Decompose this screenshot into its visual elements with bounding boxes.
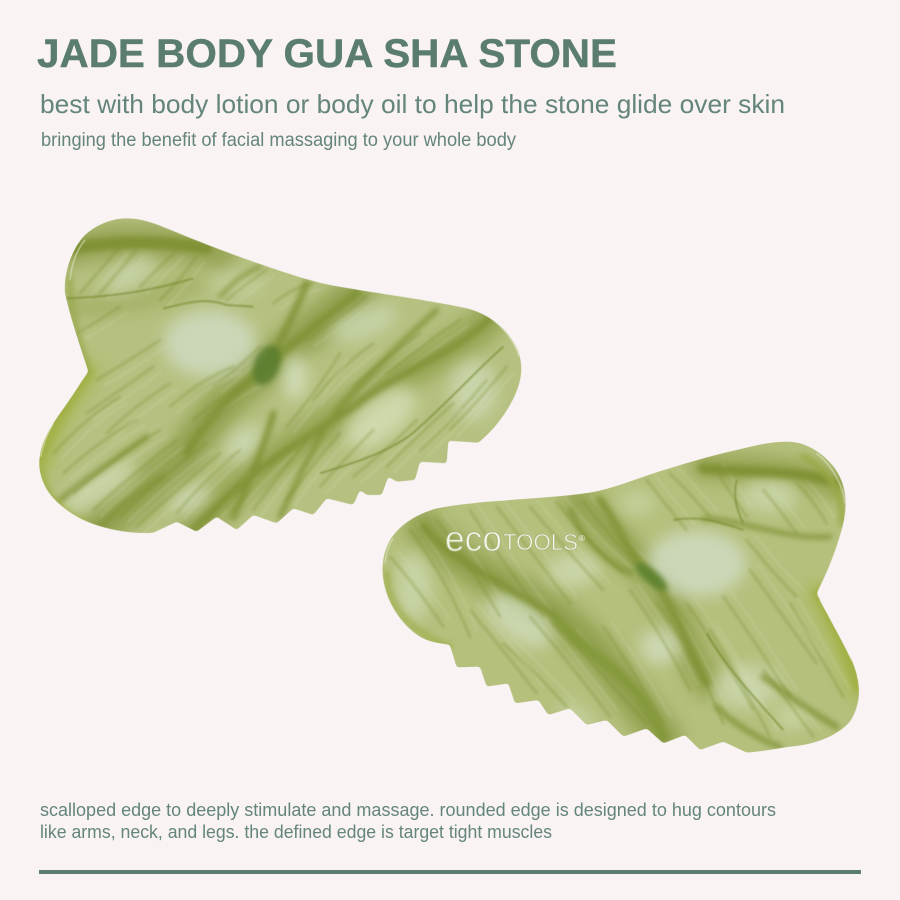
description text (40, 800, 776, 842)
fine strands (390, 470, 843, 737)
jade stone: lower right (382, 442, 860, 752)
fine strands (53, 247, 507, 527)
ecotools logo: eco (445, 518, 502, 559)
surface cracks and dark centre (67, 278, 503, 473)
bottom rule (39, 870, 861, 874)
broad olive shading (40, 242, 493, 530)
title: JADE BODY GUA SHA STONE (37, 32, 617, 76)
surface cracks and dark centre (673, 480, 783, 730)
ecotools logo (445, 518, 585, 559)
ecotools logo: TOOLS (503, 529, 578, 555)
jade stone: upper left (39, 218, 522, 534)
broad olive shading (423, 467, 858, 737)
description text: like arms, neck, and legs. the defined edge is target tight muscles (40, 822, 552, 842)
description text: scalloped edge to deeply stimulate and massage. rounded edge is designed to hug contours (40, 800, 776, 820)
subtitle: best with body lotion or body oil to help the stone glide over skin (40, 89, 785, 119)
ecotools logo: ® (579, 534, 585, 543)
tagline: bringing the benefit of facial massaging to your whole body (41, 130, 516, 151)
